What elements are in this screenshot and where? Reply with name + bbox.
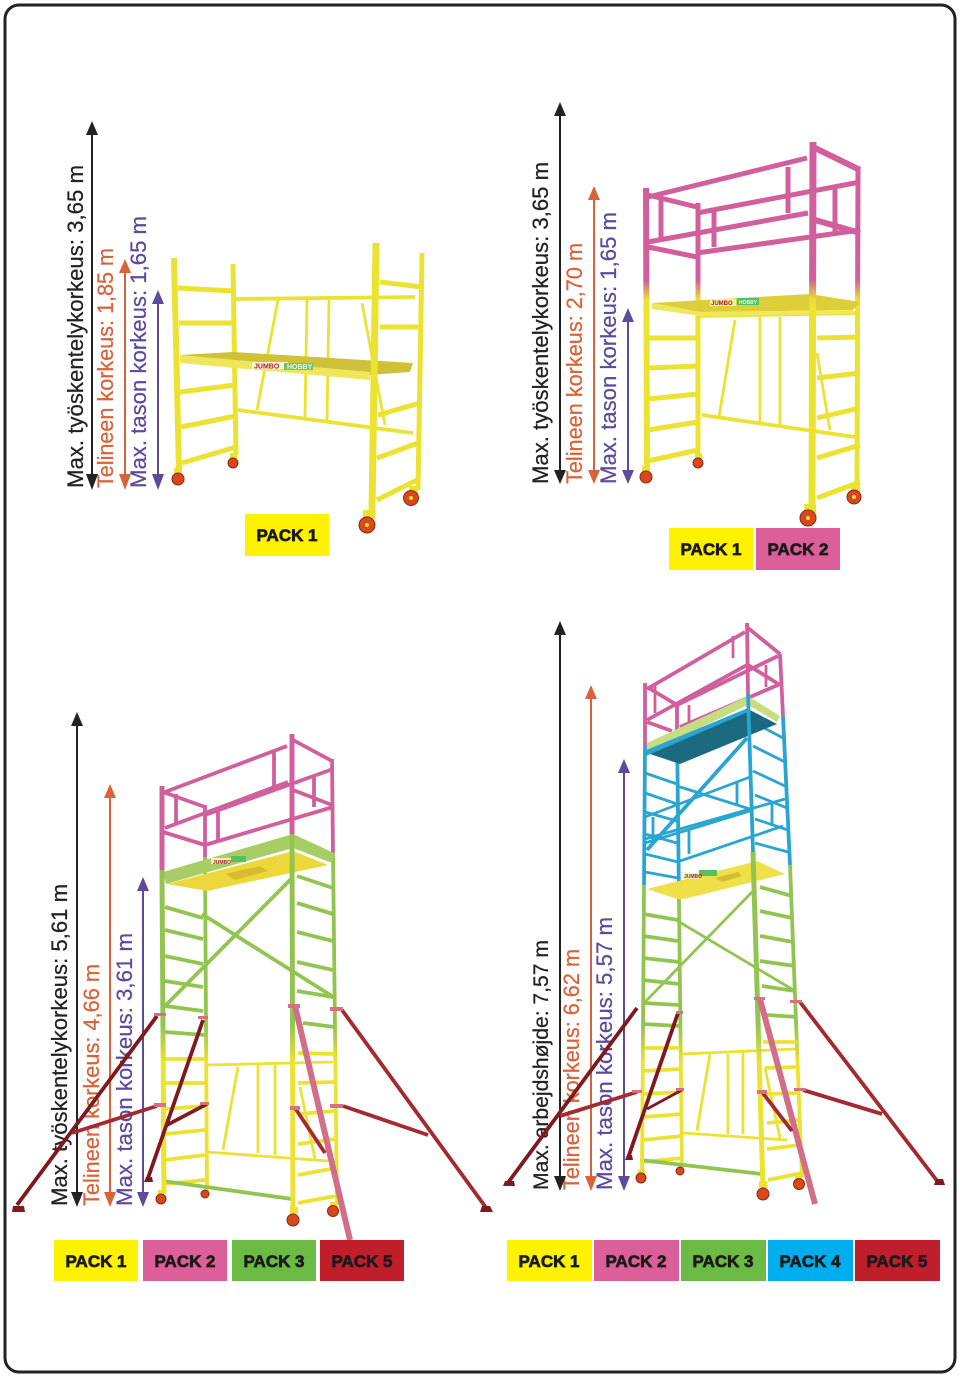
scaffold drawing: tower [12,734,493,1240]
platform [163,834,334,891]
logo: JUMBO [711,301,733,307]
logo: HOBBY [739,300,758,306]
legend: packs 1, 2, 3, 5: PACK 5 [332,1252,392,1271]
wheels [172,453,418,533]
label: max working height: Max. työskentelykorkeus: 5,61 m [47,884,72,1206]
arrow: working height [86,121,98,490]
label: scaffold height: Telineen korkeus: 2,70 m [562,243,587,484]
logo [211,856,246,866]
arrow: working height [554,621,566,1191]
legend: packs 1 to 5: PACK 2 [606,1252,666,1271]
guard rails [163,740,333,845]
middle platform [647,861,785,900]
label: scaffold height: Telineen korkeus: 4,66 m [79,964,104,1206]
legend: packs 1, 2, 3, 5 [54,1240,404,1281]
rungs and braces [640,722,802,1180]
logo [683,870,717,880]
arrow: working height [71,712,83,1207]
logo [252,362,313,371]
outriggers [503,997,945,1204]
logo [710,298,759,307]
top platform [644,696,780,764]
label: platform height: Max. tason korkeus: 3,61 m [112,933,137,1206]
label: max working height: Max. arbejdshøjde: 7,57 m [530,940,553,1190]
arrow: scaffold height [119,259,131,490]
label: platform height: Max. tason korkeus: 5,57 m [592,917,617,1190]
wheels [640,453,861,526]
logo: JUMBO [254,364,280,370]
legend: packs 1 and 2 [669,528,840,570]
arrow: platform height [152,290,164,490]
legend: packs 1 to 5: PACK 1 [518,1252,580,1271]
arrow: platform height [137,877,149,1207]
arrow: platform height [622,308,634,484]
logo: JUMBO [684,874,702,880]
label: max working height: Max. työskentelykorkeus: 3,65 m [528,162,553,484]
label: scaffold height: Telineen korkeus: 6,62 m [559,949,584,1190]
panel: pack 1 + 2 scaffold [528,102,861,570]
wheels [636,1167,804,1200]
scaffold drawing: yellow frame [172,243,422,533]
arrow: platform height [618,759,630,1191]
legend: pack 1 [245,514,329,556]
legend: pack 1: PACK 1 [256,526,318,545]
outriggers [12,1004,493,1240]
logo: HOBBY [287,364,313,371]
arrow: working height [554,102,566,484]
front posts [642,623,763,1189]
label: max working height: Max. työskentelykorkeus: 3,65 m [63,165,88,488]
label: scaffold height: Telineen korkeus: 1,85 m [93,248,118,488]
scaffold drawing: guard rails and yellow frame [640,142,861,526]
panel: all five packs scaffold [503,621,945,1281]
arrow: scaffold height [104,784,116,1207]
legend: packs 1 to 5: PACK 4 [780,1252,841,1271]
logo: JUMBO [213,860,231,866]
panel: pack 1 scaffold [63,121,422,556]
back posts [677,654,802,1178]
legend: packs 1 to 5: PACK 5 [866,1252,928,1271]
label: platform height: Max. tason korkeus: 1,65 m [596,212,621,484]
legend: packs 1, 2, 3, 5: PACK 3 [244,1252,304,1271]
legend: packs 1 and 2: PACK 1 [680,540,742,559]
scaffold drawing: tower [503,623,945,1204]
legend: packs 1, 2, 3, 5: PACK 2 [154,1252,216,1271]
wheels [156,1190,338,1226]
legend: packs 1, 2, 3, 5: PACK 1 [66,1252,126,1271]
arrow: scaffold height [585,685,597,1191]
posts and rungs [163,759,337,1205]
panel: packs 1, 2, 3, 5 scaffold [12,712,493,1281]
legend: packs 1 to 5 [507,1240,940,1281]
arrow: scaffold height [588,186,600,484]
legend: packs 1 to 5: PACK 3 [692,1252,754,1271]
label: platform height: Max. tason korkeus: 1,65 m [126,216,151,488]
legend: packs 1 and 2: PACK 2 [768,540,828,559]
guard rails [647,628,780,731]
